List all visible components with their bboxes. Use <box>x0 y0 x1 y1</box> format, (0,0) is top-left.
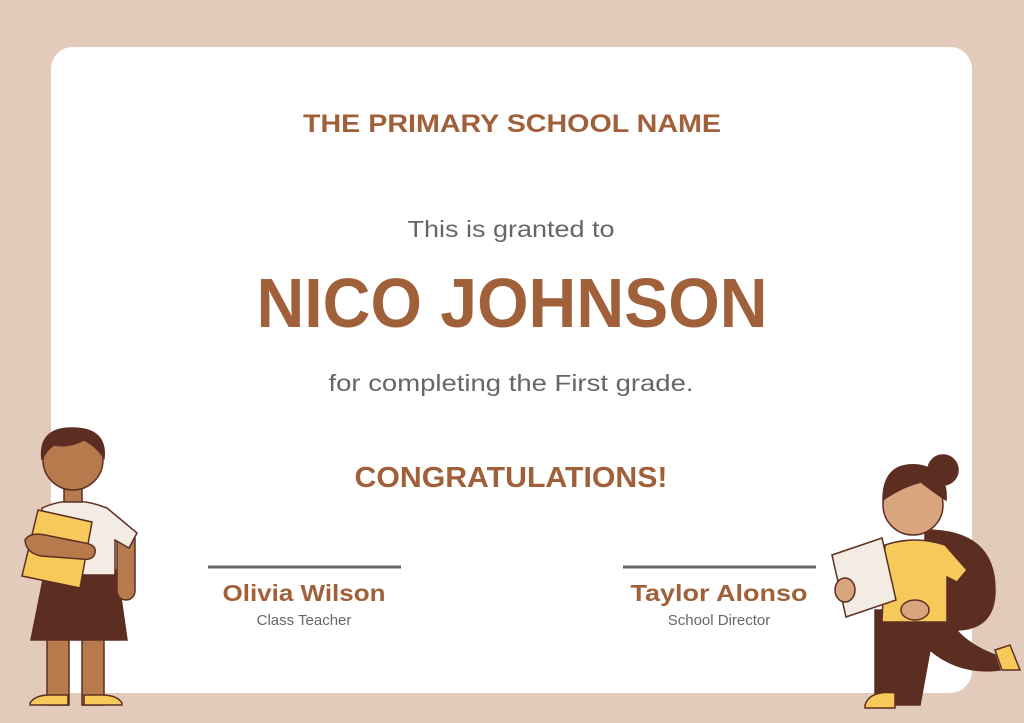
signature: teacher: Olivia Wilson <box>222 580 386 606</box>
congratulations: CONGRATULATIONS! <box>354 462 668 494</box>
signature: teacher: Class Teacher <box>257 612 351 629</box>
signature: director: School Director <box>668 612 770 629</box>
signature: director: Taylor Alonso <box>630 580 808 606</box>
illustration: left student <box>22 428 137 705</box>
illustration: right student <box>832 455 1020 708</box>
signature: director <box>623 567 816 629</box>
recipient name: NICO JOHNSON <box>256 264 768 342</box>
text: reason: for completing the First grade. <box>328 370 694 396</box>
text: granted: This is granted to <box>408 216 614 242</box>
title: school name: THE PRIMARY SCHOOL NAME <box>303 110 721 138</box>
signature: teacher <box>208 567 401 629</box>
